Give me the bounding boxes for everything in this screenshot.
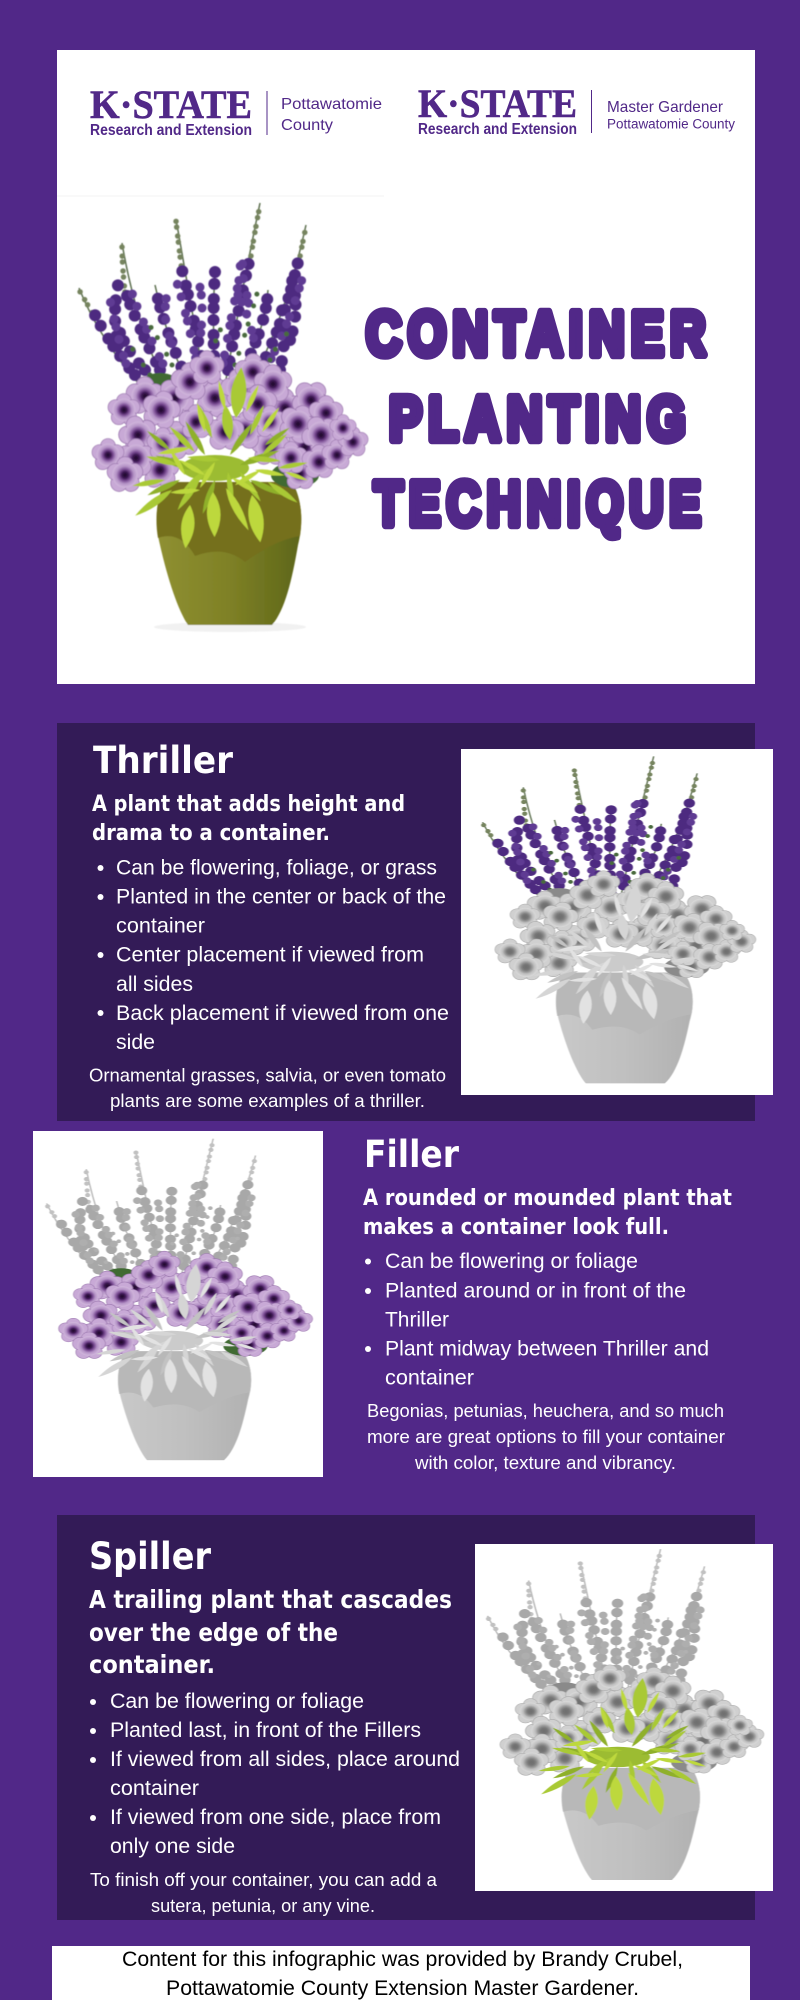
image: full-colour container planting xyxy=(79,203,368,632)
text: filler definition xyxy=(363,1186,732,1240)
list: thriller points: Back placement if viewed from one xyxy=(116,1002,449,1025)
text: spiller definition: container. xyxy=(89,1650,215,1679)
text: filler examples: with color, texture and vibrancy. xyxy=(414,1452,676,1473)
list: thriller points: side xyxy=(116,1031,155,1054)
heading: Filler: Filler xyxy=(364,1133,460,1176)
list: thriller points: Can be flowering, foliage, or grass xyxy=(116,856,437,880)
text: spiller definition: over the edge of the xyxy=(89,1618,338,1647)
logo: K-State Research and Extension Pottawatomie County xyxy=(90,82,382,139)
text: thriller definition xyxy=(92,792,405,846)
text: filler definition: A rounded or mounded plant that xyxy=(363,1186,732,1211)
list: filler points: container xyxy=(385,1366,474,1390)
title: CONTAINER xyxy=(366,300,712,369)
logo: K-State Research and Extension Master Gardener: Research and Extension xyxy=(418,121,577,138)
text: thriller definition: A plant that adds height and xyxy=(92,792,405,817)
panel: header xyxy=(57,50,755,684)
panel: thriller xyxy=(57,723,773,1121)
text: finishing tip xyxy=(90,1869,438,1916)
title: PLANTING xyxy=(389,385,692,454)
heading: Thriller: Thriller xyxy=(93,739,234,782)
list: filler points: Plant midway between Thriller and xyxy=(385,1338,709,1360)
list: spiller points: If viewed from all sides, place around xyxy=(110,1748,460,1771)
text: spiller definition: A trailing plant that cascades xyxy=(89,1585,452,1614)
list: spiller points: If viewed from one side, place from xyxy=(110,1806,441,1829)
text: filler examples xyxy=(367,1400,725,1473)
list: spiller points: Can be flowering or foliage xyxy=(110,1690,364,1713)
list: thriller points: container xyxy=(116,914,205,938)
footer: credit: Pottawatomie County Extension Master Gardener. xyxy=(166,1977,639,2000)
list: filler points xyxy=(365,1250,709,1390)
list: spiller points: Planted last, in front of the Fillers xyxy=(110,1719,421,1742)
panel: spiller xyxy=(57,1515,773,1920)
title: TECHNIQUE xyxy=(374,470,707,539)
text: thriller examples xyxy=(89,1064,446,1111)
text: thriller examples: Ornamental grasses, salvia, or even tomato xyxy=(89,1064,446,1086)
text: filler definition: makes a container look full. xyxy=(363,1215,669,1240)
text: filler examples: more are great options to fill your container xyxy=(367,1426,725,1447)
logo: K-State Research and Extension Pottawatomie County: Research and Extension xyxy=(90,122,252,139)
text: finishing tip: To finish off your container, you can add a xyxy=(90,1869,438,1890)
logo: K-State Research and Extension Master Gardener: Pottawatomie County xyxy=(607,116,735,132)
list: thriller points xyxy=(98,856,449,1054)
list: filler points: Thriller xyxy=(385,1308,449,1332)
list: filler points: Can be flowering or foliage xyxy=(385,1250,638,1273)
footer: credit: Content for this infographic was provided by Brandy Crubel, xyxy=(122,1948,683,1971)
text: thriller examples: plants are some examples of a thriller. xyxy=(110,1090,425,1111)
title xyxy=(366,300,712,539)
list: spiller points: only one side xyxy=(110,1835,235,1858)
text: spiller definition xyxy=(89,1585,452,1679)
image: spiller highlighted xyxy=(475,1544,773,1891)
logo: K-State Research and Extension Pottawatomie County: K·STATE xyxy=(90,82,252,127)
list: thriller points: Planted in the center or back of the xyxy=(116,886,446,908)
list: filler points: Planted around or in front of the xyxy=(385,1280,686,1302)
list: thriller points: all sides xyxy=(116,973,193,996)
logo: K-State Research and Extension Master Gardener: K·STATE xyxy=(418,81,577,126)
list: spiller points xyxy=(90,1690,460,1858)
text: finishing tip: sutera, petunia, or any vine. xyxy=(151,1895,375,1916)
heading: Spiller: Spiller xyxy=(89,1535,212,1578)
list: thriller points: Center placement if viewed from xyxy=(116,944,424,966)
panel: filler xyxy=(33,1131,732,1477)
text: filler examples: Begonias, petunias, heuchera, and so much xyxy=(367,1400,724,1421)
logo: K-State Research and Extension Pottawatomie County: County xyxy=(281,117,333,134)
text: thriller definition: drama to a container. xyxy=(92,821,330,846)
image: thriller highlighted xyxy=(461,749,773,1095)
footer: credit xyxy=(52,1946,750,2000)
logo: K-State Research and Extension Pottawatomie County: Pottawatomie xyxy=(281,96,382,113)
list: spiller points: container xyxy=(110,1777,199,1800)
image: filler highlighted xyxy=(33,1131,323,1477)
logo: K-State Research and Extension Master Gardener xyxy=(418,81,735,138)
logo: K-State Research and Extension Master Gardener: Master Gardener xyxy=(607,99,724,116)
